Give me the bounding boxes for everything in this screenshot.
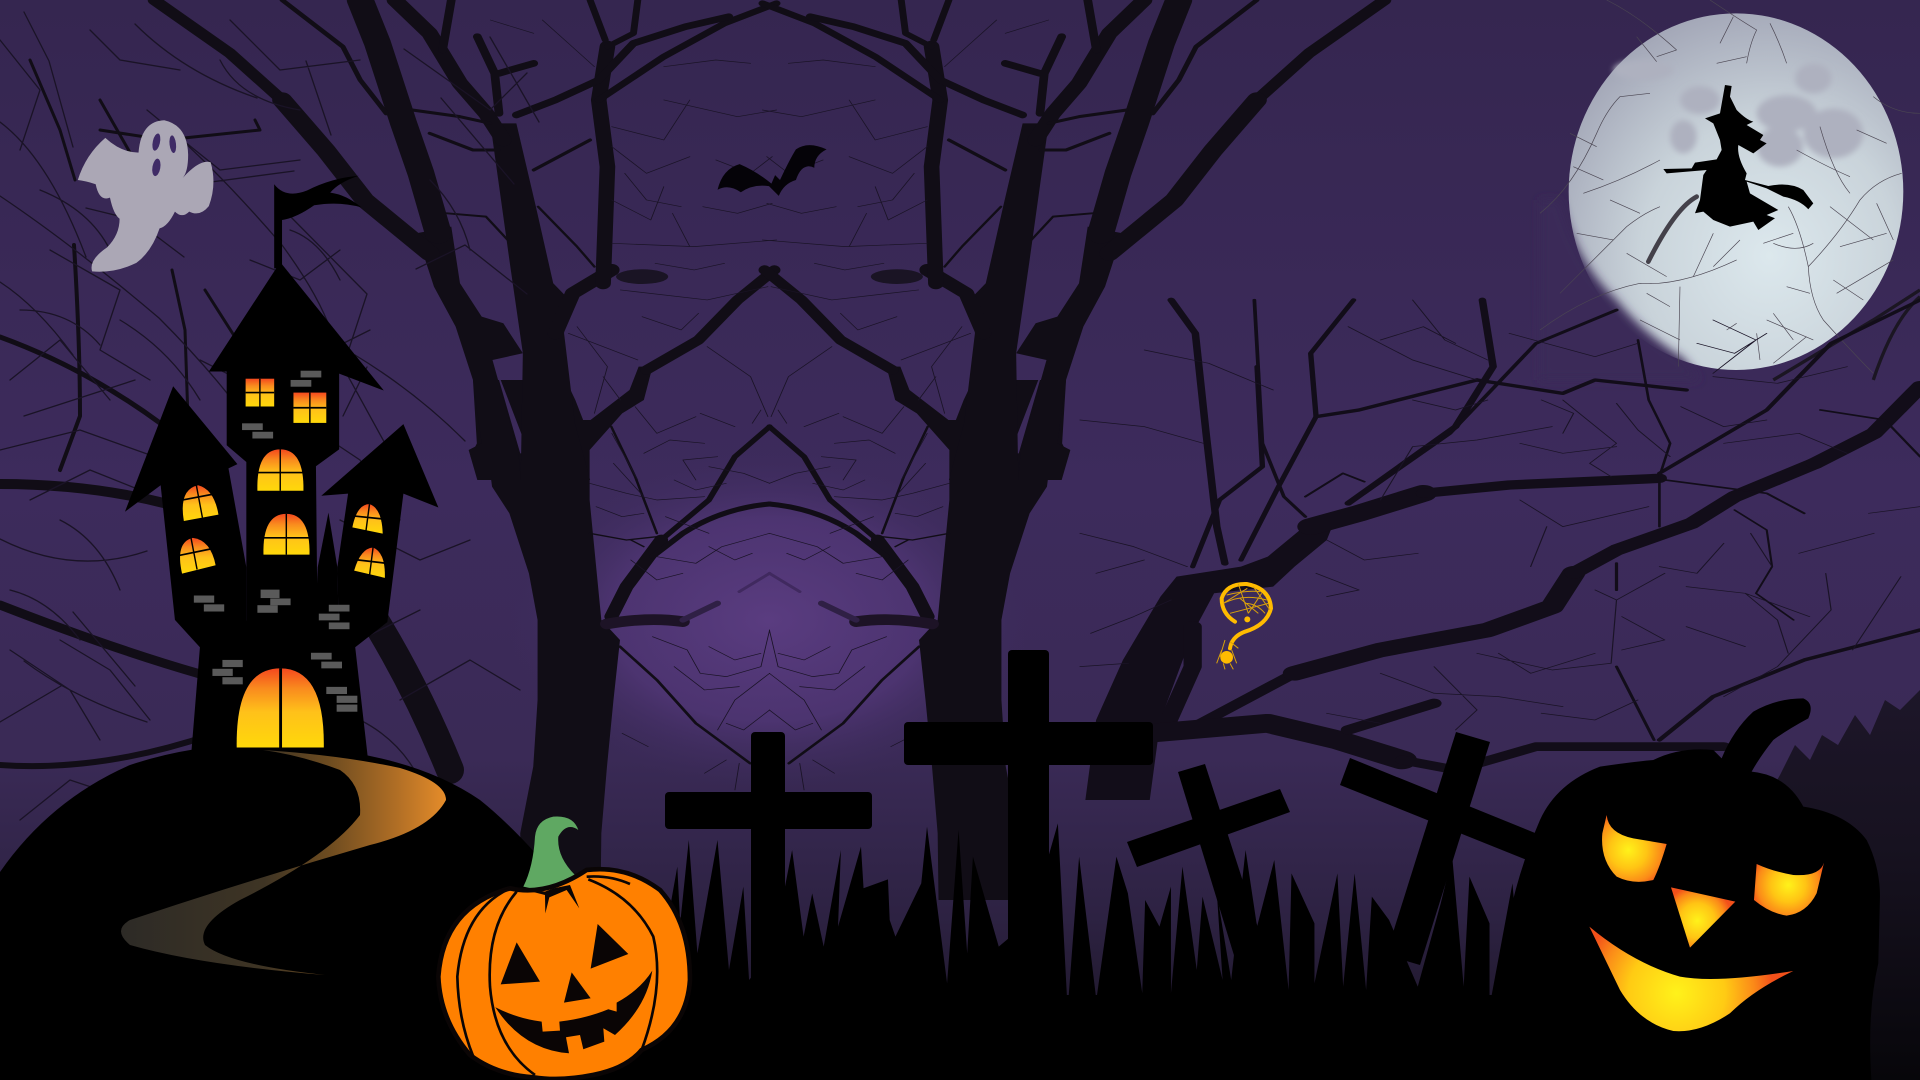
pumpkin body: [438, 869, 690, 1079]
ghost: [78, 120, 213, 272]
face: [495, 924, 652, 1053]
grave crosses: [665, 650, 1540, 992]
winding road: [121, 750, 446, 975]
cross 2: [904, 650, 1153, 990]
jack-o-lantern silhouette: [1510, 698, 1880, 1080]
cross 1: [665, 732, 872, 992]
left side branches: [0, 12, 539, 880]
mirrored copy of the central tree: [762, 0, 1385, 900]
stem notches: [515, 885, 579, 913]
bricks: [194, 371, 357, 712]
moon: [1540, 0, 1920, 380]
cross 3: [1127, 764, 1290, 975]
house silhouette: [125, 176, 438, 757]
upper limbs: [154, 0, 777, 480]
mirrored central trees: [154, 0, 777, 900]
moon branches: [1540, 0, 1920, 373]
carved orange pumpkin: [438, 816, 690, 1079]
stem: [523, 816, 578, 892]
mouth: [1589, 927, 1793, 1031]
lower trunk and inner arches: [470, 367, 770, 900]
ground: [560, 995, 1840, 1080]
ribs: [457, 876, 657, 1075]
nose: [1671, 887, 1735, 948]
left eye: [1602, 815, 1667, 882]
spider web question mark: [1217, 584, 1271, 669]
grass: [657, 823, 1570, 1080]
haunted house: [125, 176, 438, 757]
right side dark bush: [1750, 690, 1920, 1080]
lit windows: [180, 379, 385, 747]
witch on broomstick: [1663, 85, 1813, 230]
right hand tree: [1080, 300, 1920, 800]
right eye: [1754, 863, 1824, 916]
cross 4: [1340, 732, 1540, 965]
bat: [718, 145, 827, 196]
hill: [0, 745, 700, 1080]
